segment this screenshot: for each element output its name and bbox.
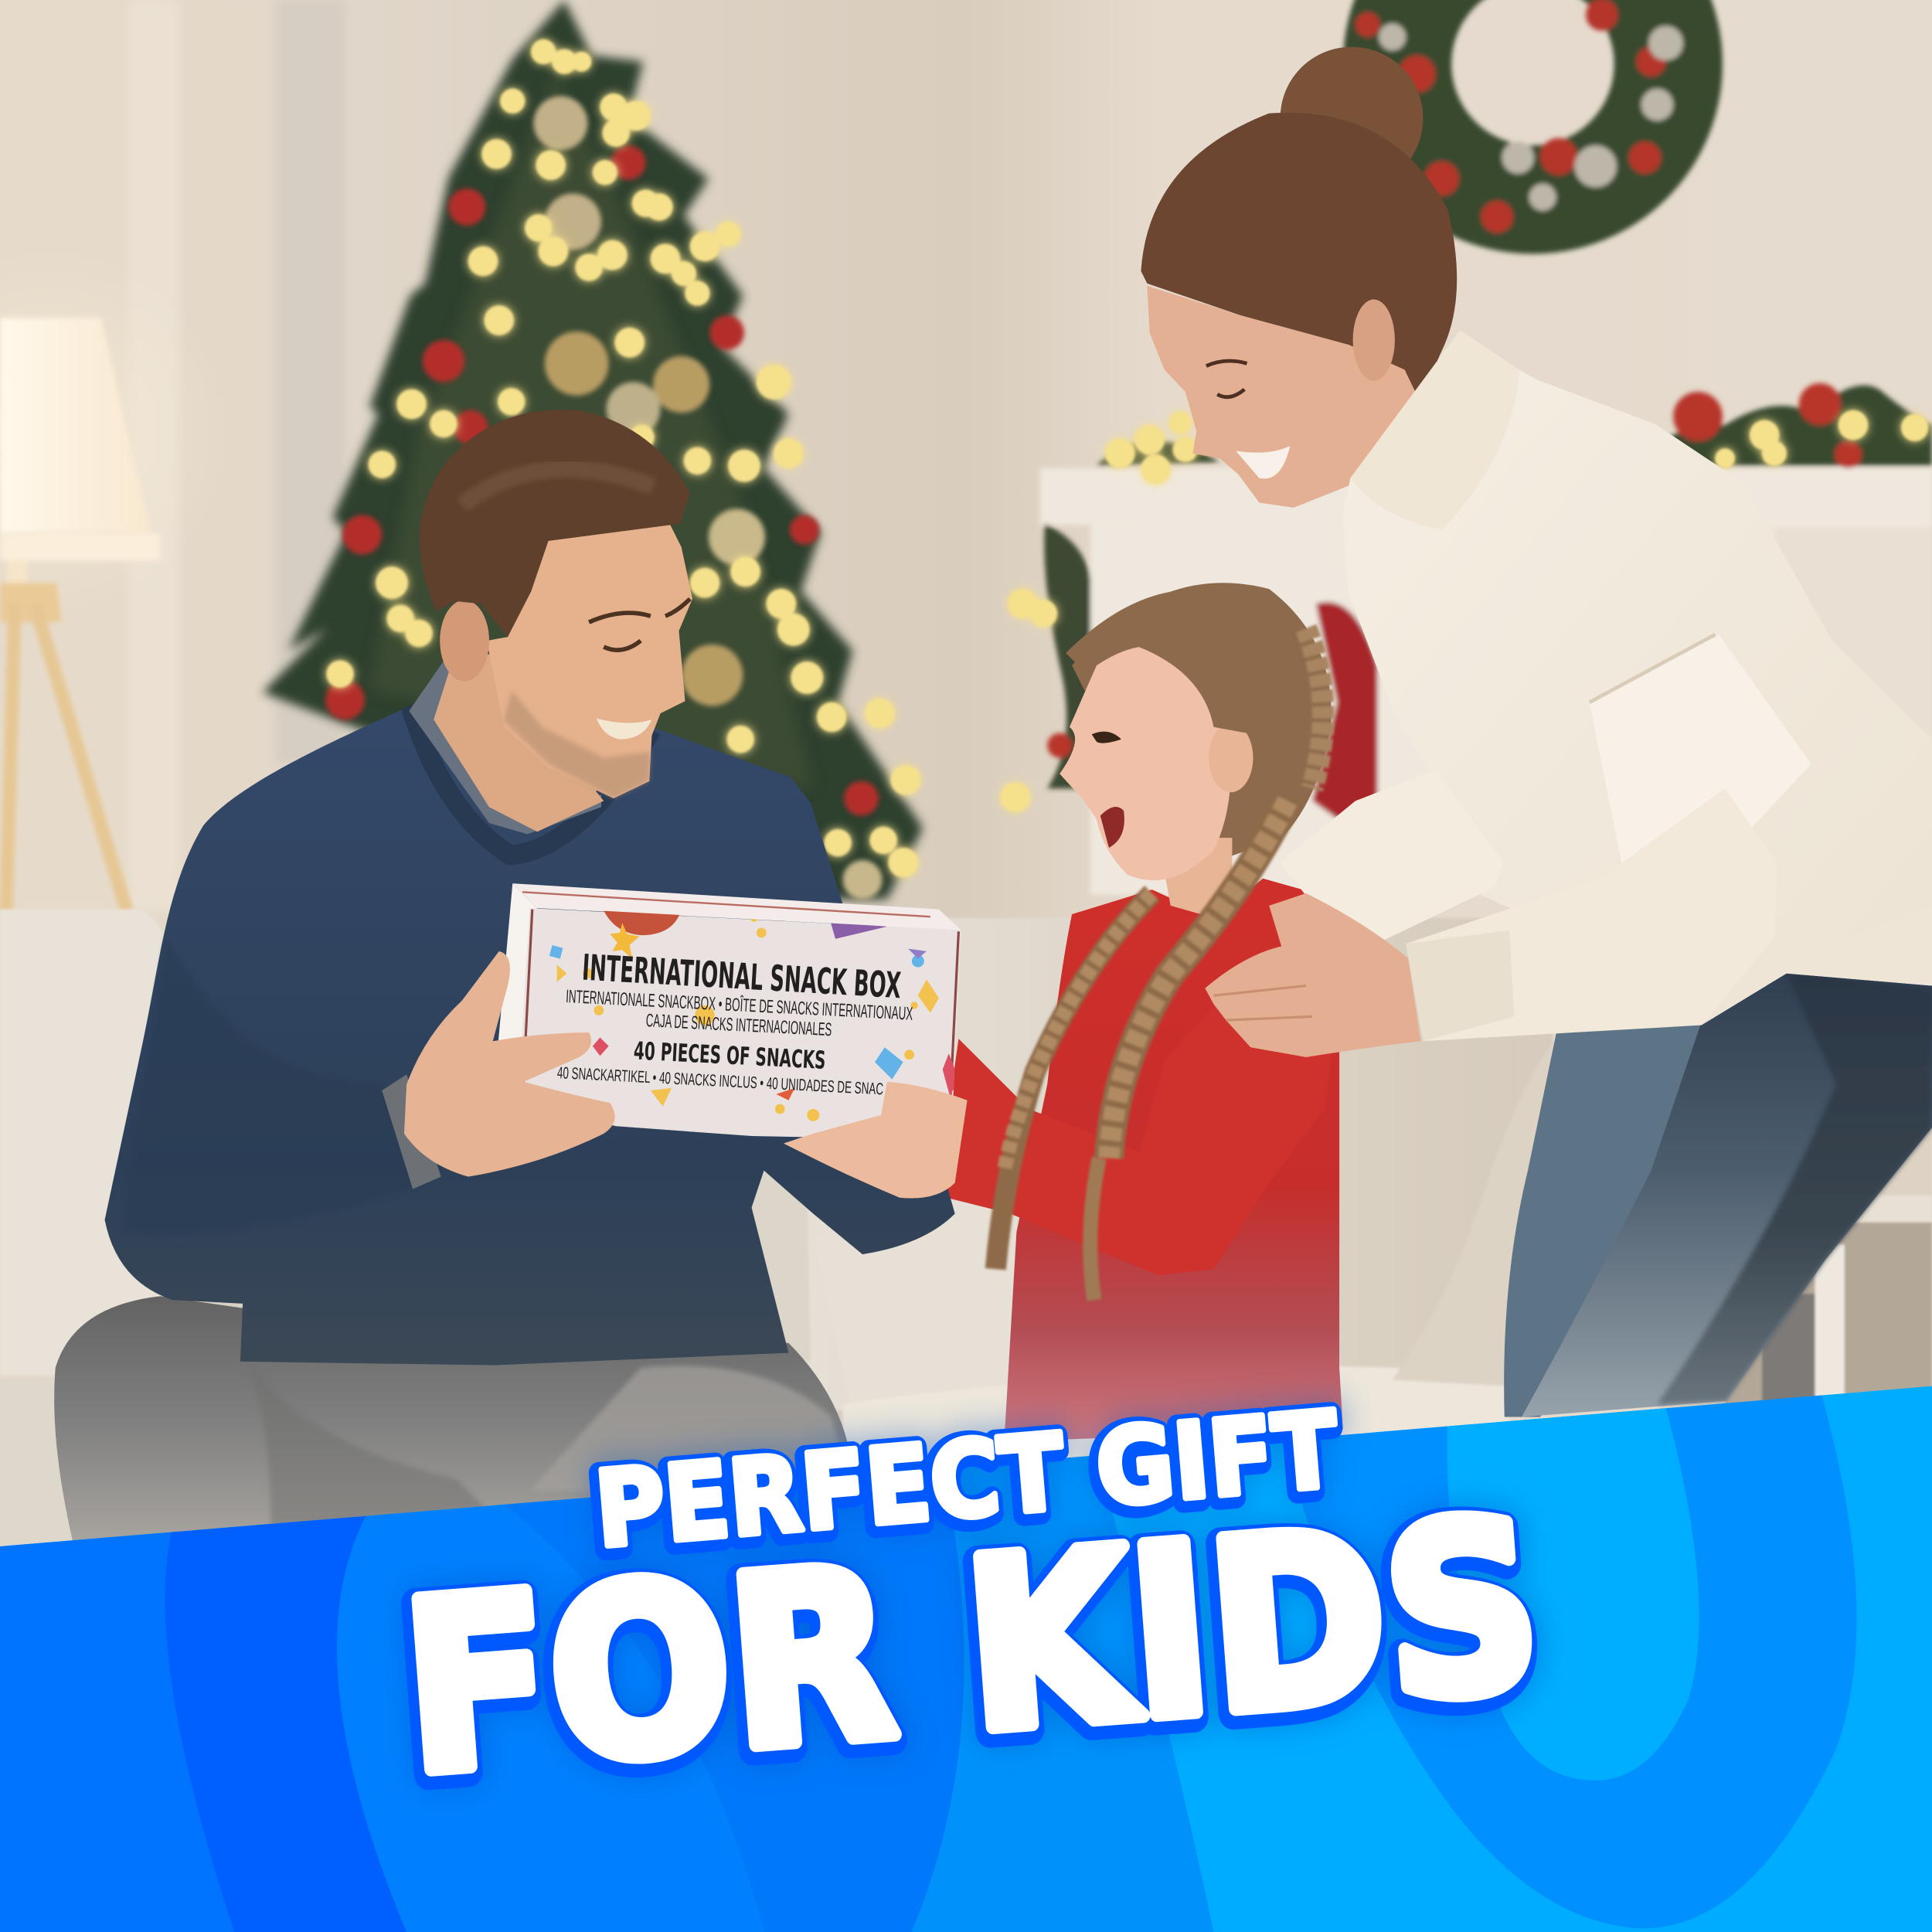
man ear: [440, 600, 489, 682]
curtains: [0, 0, 345, 912]
hair highlight: [462, 469, 653, 505]
man sweater: [105, 706, 955, 1366]
neck: [1158, 838, 1232, 918]
christmas tree: [263, 0, 1928, 900]
girl face: [1060, 645, 1231, 880]
far sleeve: [1281, 770, 1503, 944]
woman face: [1147, 286, 1420, 508]
blue banner: [0, 1380, 1932, 1932]
snack box: [498, 883, 961, 1140]
headline: PERFECT GIFT: PERFECT GIFT: [591, 1388, 1342, 1571]
girl hand: [784, 1082, 968, 1199]
man collar: [409, 659, 601, 834]
jeans: [1504, 968, 1932, 1417]
ornaments: [325, 96, 883, 900]
stubble: [504, 690, 651, 798]
man: [54, 410, 955, 1546]
sleeve seam: [1590, 634, 1811, 949]
lamp: [0, 247, 234, 912]
girl: [937, 583, 1343, 1441]
girl arm: [937, 986, 1337, 1275]
cuff: [1406, 930, 1515, 1041]
box left side: [498, 883, 537, 1103]
headline: FOR KIDS: FOR KIDS: [396, 1473, 1549, 1830]
turtleneck: [1350, 330, 1519, 530]
mantel: [1040, 383, 1932, 895]
box text: CAJA DE SNACKS INTERNACIONALES: [645, 1010, 832, 1040]
near sleeve: [1406, 788, 1777, 1041]
tree lights: [327, 39, 1928, 877]
wreath: [1355, 0, 1683, 233]
woman ear: [1353, 299, 1395, 381]
headline: PERFECT GIFT: PERFECT GIFT: [591, 1389, 1342, 1572]
girl body: [1004, 879, 1343, 1441]
woman: [1141, 47, 1932, 1417]
box text: INTERNATIONAL SNACK BOX: [581, 947, 902, 1006]
sweater torso: [1343, 330, 1932, 1041]
box text: INTERNATIONALE SNACKBOX • BOÎTE DE SNACKS INTERNATIONAUX: [566, 986, 913, 1025]
brow and eye: [589, 599, 690, 650]
arm shading: [123, 937, 425, 1234]
man hair: [420, 410, 690, 637]
man neck: [434, 653, 604, 832]
headline: FOR KIDS: FOR KIDS: [396, 1470, 1549, 1826]
box text: [556, 947, 913, 1098]
box text: 40 PIECES OF SNACKS: [633, 1036, 826, 1075]
man trousers: [54, 1296, 850, 1546]
sofa: [0, 910, 1932, 1546]
woman smile: [1236, 446, 1290, 478]
man hand: [404, 951, 615, 1177]
hair: [1141, 47, 1457, 400]
girl fringe: [1066, 590, 1281, 733]
braids: [995, 628, 1323, 1300]
girl back hair: [1072, 583, 1332, 862]
ribbed hem: [1766, 906, 1932, 986]
box top flap: [512, 883, 961, 930]
woman arms and hand: [1205, 770, 1777, 1057]
box front: [518, 908, 961, 1140]
hand: [1205, 893, 1420, 1057]
smile: [597, 719, 651, 740]
box text: 40 SNACKARTIKEL • 40 SNACKS INCLUS • 40 UNIDADES DE SNAC: [556, 1063, 884, 1098]
man face: [487, 525, 692, 798]
man shirt cuff: [382, 1074, 441, 1189]
headline: PERFECT GIFT: PERFECT GIFT: [588, 1392, 1340, 1575]
sweater rib collar: [410, 706, 651, 855]
box decorations: [604, 910, 679, 935]
banner bands: [0, 1528, 234, 1932]
headline: FOR KIDS: FOR KIDS: [393, 1475, 1546, 1831]
